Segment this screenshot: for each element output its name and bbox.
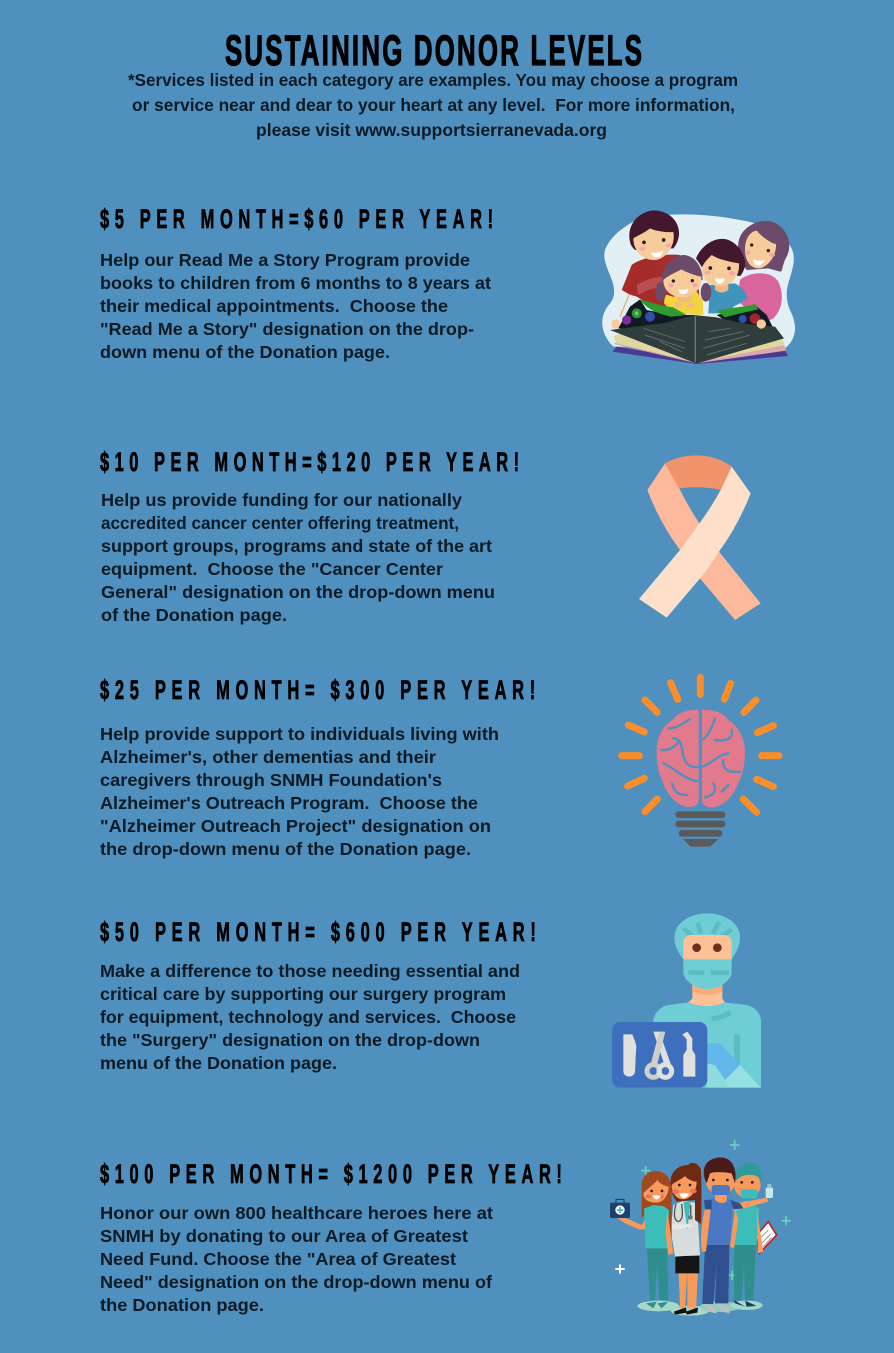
intro note: [128, 70, 738, 140]
intro note: *Services listed in each category are examples. You may choose a program: [128, 70, 738, 90]
text: $5 level: books to children from 6 months to 8 years at: [100, 273, 491, 293]
text: $100 level: the Donation page.: [100, 1295, 264, 1315]
intro note: or service near and dear to your heart at any level. For more information,: [132, 95, 735, 115]
text: $10 level: Help us provide funding for our nationally: [101, 490, 462, 510]
text: $5 level: Help our Read Me a Story Program provide: [100, 250, 470, 270]
father: [622, 255, 702, 313]
boy: [708, 283, 747, 313]
text: $10 level: [101, 490, 495, 625]
text: $10 level: support groups, programs and state of the art: [101, 536, 492, 556]
pop-up scene: [618, 299, 695, 332]
text: $25 level: caregivers through SNMH Foundation's: [100, 770, 442, 790]
text: $50 level: menu of the Donation page.: [100, 1053, 337, 1073]
medical kit: [610, 1199, 630, 1218]
heading: $100 level: $100 PER MONTH= $1200 PER YEAR!: [100, 1159, 562, 1189]
icon: brain light bulb: [622, 677, 779, 847]
text: $25 level: "Alzheimer Outreach Project" designation on: [100, 816, 491, 836]
heading: $50 level: $50 PER MONTH= $600 PER YEAR!: [100, 917, 536, 947]
text: $25 level: [100, 724, 499, 859]
icon: healthcare workers: [610, 1140, 791, 1316]
text: $10 level: General" designation on the drop-down menu: [101, 582, 495, 602]
text: $100 level: Need Fund. Choose the "Area of Greatest: [100, 1249, 456, 1269]
text: $50 level: critical care by supporting our surgery program: [100, 984, 506, 1004]
text: $25 level: Alzheimer's Outreach Program. Choose the: [100, 793, 478, 813]
heading: $5 level: $5 PER MONTH=$60 PER YEAR!: [100, 204, 493, 234]
text: $25 level: Help provide support to individuals living with: [100, 724, 499, 744]
title: SUSTAINING DONOR LEVELS: [225, 26, 642, 75]
doctor: [678, 1263, 698, 1308]
man: [702, 1245, 729, 1304]
text: $50 level: the "Surgery" designation on the drop-down: [100, 1030, 480, 1050]
nurse right: [734, 1245, 756, 1300]
text: $100 level: Need" designation on the drop-down menu of: [100, 1272, 492, 1292]
text: $25 level: Alzheimer's, other dementias and their: [100, 747, 436, 767]
mother: [737, 273, 782, 323]
text: $25 level: the drop-down menu of the Donation page.: [100, 839, 471, 859]
book cover: [610, 315, 784, 364]
text: $50 level: for equipment, technology and services. Choose: [100, 1007, 516, 1027]
text: $5 level: "Read Me a Story" designation on the drop-: [100, 319, 474, 339]
text: $10 level: of the Donation page.: [101, 605, 287, 625]
icon: surgeon with instrument tray: [612, 913, 761, 1088]
text: $5 level: [100, 250, 491, 362]
text: $100 level: [100, 1203, 493, 1315]
girl: [664, 291, 703, 315]
text: $10 level: accredited cancer center offering treatment,: [101, 513, 459, 533]
text: $50 level: Make a difference to those needing essential and: [100, 961, 520, 981]
clipboard: [756, 1222, 777, 1253]
intro note: please visit www.supportsierranevada.org: [256, 120, 607, 140]
text: $50 level: [100, 961, 520, 1073]
nurse left: [642, 1171, 672, 1237]
text: $10 level: equipment. Choose the "Cancer Center: [101, 559, 443, 579]
text: $5 level: down menu of the Donation page.: [100, 342, 390, 362]
text: $100 level: SNMH by donating to our Area of Greatest: [100, 1226, 468, 1246]
text: $100 level: Honor our own 800 healthcare heroes here at: [100, 1203, 493, 1223]
icon: family reading a book: [602, 211, 795, 364]
text: $5 level: their medical appointments. Choose the: [100, 296, 448, 316]
book pages: [613, 347, 788, 364]
icon: awareness ribbon: [639, 455, 761, 620]
heading: $10 level: $10 PER MONTH=$120 PER YEAR!: [100, 447, 519, 477]
heading: $25 level: $25 PER MONTH= $300 PER YEAR!: [100, 675, 535, 705]
